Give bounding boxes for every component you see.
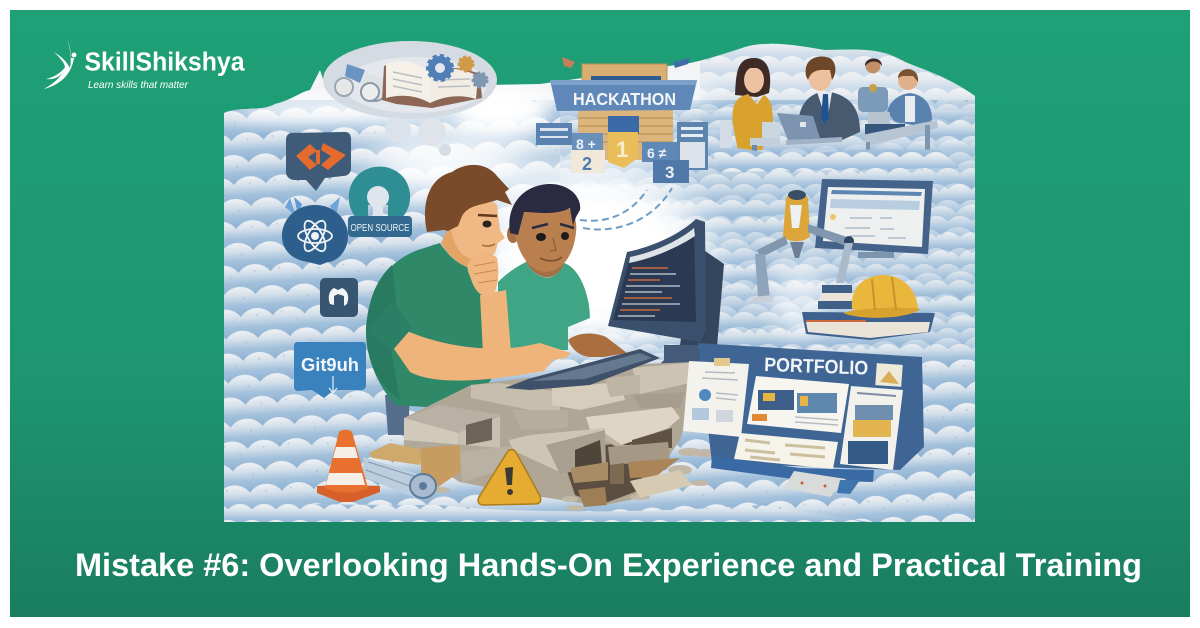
monitor screen xyxy=(608,219,706,342)
jeans xyxy=(385,395,410,435)
logo tagline: Learn skills that matter xyxy=(88,79,188,91)
neck and head xyxy=(507,184,580,277)
hard hat xyxy=(843,275,921,318)
keyboard xyxy=(505,349,660,390)
github sign xyxy=(294,342,366,398)
icon: react atom badge xyxy=(282,197,348,265)
scoreboards and podium: 2 xyxy=(582,154,592,174)
forearm and fist xyxy=(467,253,511,354)
rubble xyxy=(430,448,715,511)
resume page xyxy=(683,358,749,437)
illustration: cloud backdrop xyxy=(224,30,975,522)
cardboard bricks xyxy=(369,443,460,487)
blueprint roll xyxy=(363,457,436,498)
scoreboards and podium xyxy=(536,122,708,183)
right page xyxy=(840,386,903,470)
boy standing xyxy=(858,58,888,112)
monitor xyxy=(815,179,933,258)
flags xyxy=(562,57,690,68)
logo: SkillShikshya xyxy=(44,38,245,91)
icon: gears xyxy=(428,56,487,87)
woman in yellow xyxy=(720,58,780,167)
lower page xyxy=(734,433,838,469)
background scene: team at desks xyxy=(712,56,960,172)
scoreboards and podium: 1 xyxy=(616,137,628,162)
construction bricks xyxy=(369,362,715,511)
icon: swoosh figure xyxy=(44,38,76,89)
clouds under the desks xyxy=(712,148,960,172)
traffic cone xyxy=(317,430,380,502)
scoreboards and podium: 3 xyxy=(665,163,674,182)
mid blocks xyxy=(509,407,680,474)
thought bubble with book and gears xyxy=(323,41,497,156)
board and base xyxy=(698,343,924,470)
icon: open source badge xyxy=(348,167,412,237)
icon: scrolls xyxy=(335,64,387,101)
seated boy with laptop xyxy=(862,69,938,158)
icon: open book xyxy=(382,61,482,108)
github sign: Git9uh xyxy=(301,355,359,375)
portfolio board xyxy=(683,343,924,497)
robot arm with monitor, books and hard hat xyxy=(752,179,935,340)
pinned note xyxy=(875,363,903,387)
hackathon stage xyxy=(536,57,708,183)
scoreboards and podium: 6 ≠ xyxy=(647,145,667,161)
icon: github square xyxy=(320,278,358,317)
desktop computer xyxy=(608,219,724,372)
lower brown bricks xyxy=(570,458,692,507)
foreground clouds xyxy=(224,504,869,522)
large left block xyxy=(404,405,520,482)
base of the wall xyxy=(404,362,695,506)
person: younger student xyxy=(498,184,627,357)
shirt xyxy=(498,262,590,350)
man in suit xyxy=(777,56,860,145)
robot xyxy=(752,190,854,303)
arm xyxy=(568,334,627,357)
projects page xyxy=(747,376,849,433)
scoreboards and podium: 8 + xyxy=(576,136,596,152)
dark pit xyxy=(560,440,650,505)
person: older student xyxy=(366,165,571,435)
upper blocks xyxy=(471,362,695,430)
shirt xyxy=(366,243,510,410)
icon: code speech bubble xyxy=(286,132,351,191)
neck xyxy=(441,228,481,270)
open source label: OPEN SOURCE xyxy=(350,223,410,234)
small tablet and phone xyxy=(784,471,860,497)
dashed connector arrows xyxy=(580,188,672,229)
head xyxy=(425,165,512,260)
portfolio heading: PORTFOLIO xyxy=(764,354,869,380)
monitor rear xyxy=(652,244,724,372)
title: Mistake #6: Overlooking Hands-On Experience and Practical Training xyxy=(75,547,1142,583)
logo wordmark: SkillShikshya xyxy=(84,48,245,76)
sleeve and pointing arm xyxy=(367,300,571,381)
building xyxy=(578,64,673,160)
hackathon sign xyxy=(550,80,697,111)
stack of books xyxy=(802,285,935,340)
hackathon sign: HACKATHON xyxy=(573,89,676,109)
warning triangle xyxy=(478,450,541,505)
